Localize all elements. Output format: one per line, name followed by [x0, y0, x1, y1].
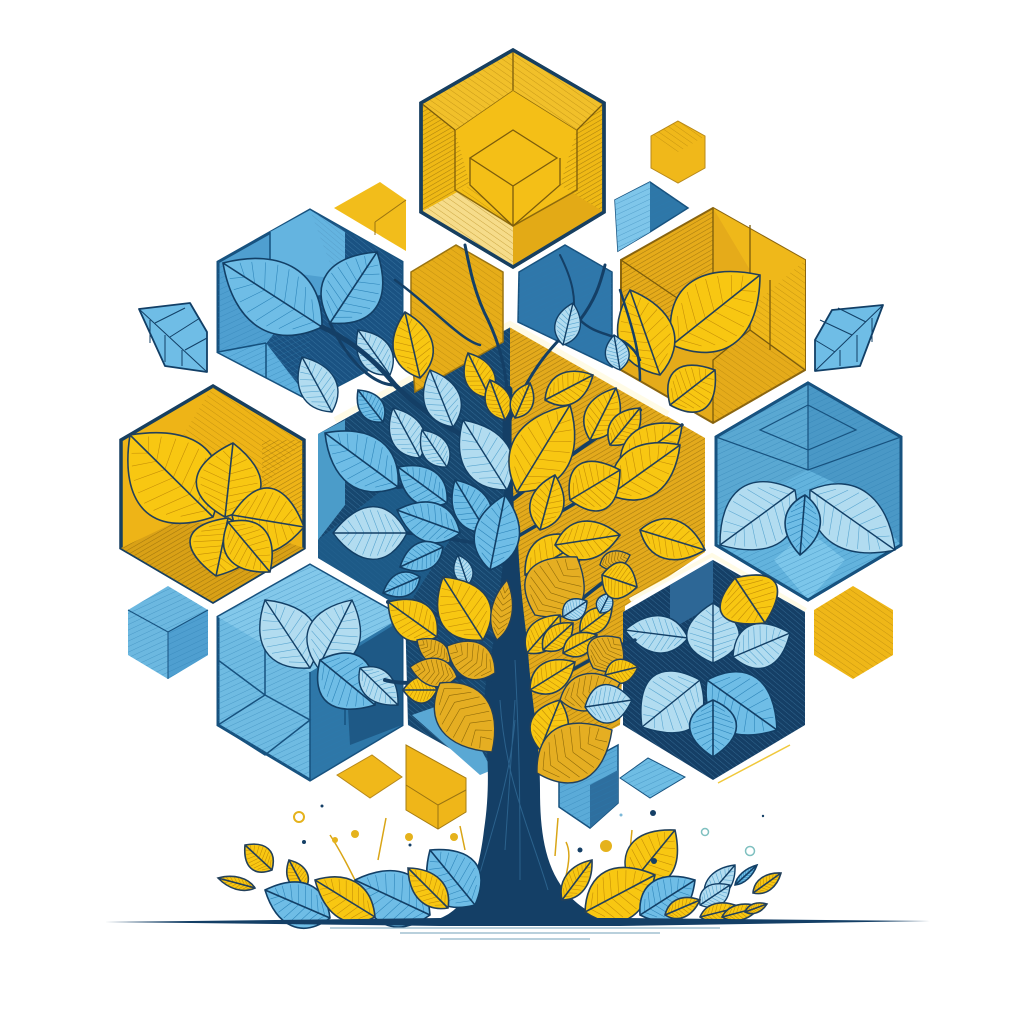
cube: top right yellow — [651, 121, 705, 183]
tree branches — [322, 245, 682, 690]
grass strokes — [330, 818, 640, 890]
leaves: lower left hexagon — [242, 585, 409, 727]
hexagon: upper left blue — [218, 210, 402, 400]
hexagon: lower left blue — [218, 565, 402, 780]
tree leaves: yellow right side — [376, 308, 711, 798]
cube: top right blue — [615, 182, 688, 251]
cube: bottom blue rhombus — [620, 758, 685, 798]
left ground leaves — [216, 832, 495, 940]
cube: right yellow — [814, 586, 893, 679]
leaves: upper right hexagon — [604, 246, 783, 424]
leaves: upper left hexagon — [204, 234, 403, 421]
cube: bottom yellow rhombus — [337, 755, 402, 798]
cube: left blue — [128, 586, 208, 679]
leaves in the hexagons — [99, 234, 913, 757]
leaf: left side blue — [139, 303, 207, 372]
hexagon: left yellow — [121, 386, 304, 602]
hexagon: upper right yellow — [621, 208, 805, 423]
cube: top left yellow — [334, 182, 406, 251]
grass and fallen leaves — [216, 814, 785, 940]
central hexagon behind the tree — [318, 324, 705, 782]
side leaves — [139, 303, 883, 372]
scattered dots — [294, 804, 764, 864]
hexagon: right blue — [716, 383, 901, 600]
cube: bottom blue box — [559, 745, 618, 828]
cube: bottom yellow box — [406, 745, 466, 829]
right ground leaves — [553, 814, 785, 935]
small yellow hexagon behind branches — [411, 245, 503, 392]
leaves: lower right hexagon — [622, 562, 799, 757]
ground line — [105, 918, 930, 939]
hexagon: lower right navy — [623, 555, 806, 783]
leaf: right side blue — [815, 305, 883, 371]
hexagon: top yellow — [421, 50, 604, 267]
leaves: left yellow hexagon — [99, 404, 310, 587]
small blue hexagon behind branches — [518, 245, 612, 367]
tree trunk — [430, 540, 610, 921]
small floating cubes — [128, 121, 893, 829]
tree leaves: blue left side — [309, 300, 632, 604]
leaves: right blue hexagon — [700, 464, 913, 575]
